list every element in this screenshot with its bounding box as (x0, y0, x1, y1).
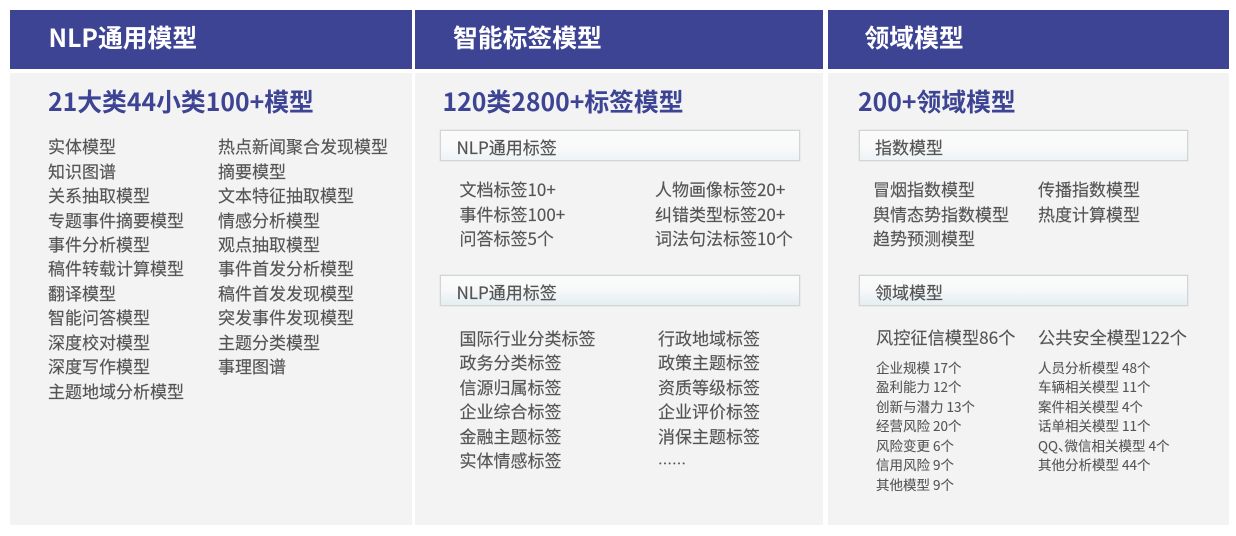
model list column 2: 事件首发分析模型 (218, 255, 354, 280)
risk model breakdown (876, 357, 975, 494)
model list column 2 (218, 133, 388, 378)
model list column 1: 翻译模型 (48, 280, 116, 305)
heading: 风控征信模型86个: 风控征信模型86个 (876, 324, 1015, 349)
risk model breakdown: 盈利能力 12个 (876, 376, 962, 396)
header: 智能标签模型 (415, 10, 823, 69)
model list column 1: 深度写作模型 (48, 353, 150, 378)
public safety model breakdown: 车辆相关模型 11个 (1038, 376, 1151, 396)
tag list column 3 (460, 325, 596, 472)
sub-heading: NLP通用标签 (440, 130, 800, 161)
tag list column 1 (460, 176, 565, 250)
sub-heading: 指数模型 (859, 130, 1188, 161)
model list column 1 (48, 133, 184, 403)
tag list column 3: 政务分类标签 (460, 349, 562, 374)
public safety model breakdown: 话单相关模型 11个 (1038, 415, 1151, 435)
sub-heading: 领域模型 (859, 275, 1188, 306)
sub-heading: NLP通用标签 (second) (440, 275, 800, 306)
tag list column 3: 企业综合标签 (460, 398, 562, 423)
index model list column 1: 舆情态势指数模型 (873, 201, 1009, 226)
model list column 1: 智能问答模型 (48, 304, 150, 329)
model list column 2: 突发事件发现模型 (218, 304, 354, 329)
model list column 2: 热点新闻聚合发现模型 (218, 133, 388, 158)
model list column 1: 实体模型 (48, 133, 116, 158)
model list column 2: 摘要模型 (218, 158, 286, 183)
header: 领域模型 (828, 10, 1229, 69)
model list column 1: 深度校对模型 (48, 329, 150, 354)
header: NLP通用模型 (10, 10, 412, 69)
tag list column 2: 词法句法标签10个 (655, 225, 793, 250)
tag list column 2: 人物画像标签20+ (655, 176, 785, 201)
model list column 2: 主题分类模型 (218, 329, 320, 354)
model list column 2: 文本特征抽取模型 (218, 182, 354, 207)
model list column 1: 事件分析模型 (48, 231, 150, 256)
public safety model breakdown: QQ、微信相关模型 4个 (1038, 435, 1170, 455)
model list column 2: 事理图谱 (218, 353, 286, 378)
header: NLP通用模型: NLP通用模型 (48, 19, 197, 55)
model list column 1: 稿件转载计算模型 (48, 255, 184, 280)
panel: 领域模型 (828, 73, 1229, 525)
panel: 智能标签模型 (415, 73, 823, 525)
risk model breakdown: 创新与潜力 13个 (876, 396, 975, 416)
panel title: 21大类44小类100+模型: 21大类44小类100+模型 (48, 83, 314, 119)
sub-heading: 领域模型: 领域模型 (875, 279, 943, 304)
tag list column 3: 信源归属标签 (460, 374, 562, 399)
index model list column 2 (1038, 176, 1140, 226)
index model list column 1 (873, 176, 1009, 250)
tag list column 1: 事件标签100+ (460, 201, 565, 226)
index model list column 1: 冒烟指数模型 (873, 176, 975, 201)
model list column 2: 稿件首发发现模型 (218, 280, 354, 305)
sub-heading: 指数模型: 指数模型 (875, 134, 943, 159)
public safety model breakdown (1038, 357, 1170, 474)
tag list column 2: 纠错类型标签20+ (655, 201, 785, 226)
header: 智能标签模型: 智能标签模型 (453, 19, 602, 55)
tag list column 1: 文档标签10+ (460, 176, 556, 201)
heading: 公共安全模型122个: 公共安全模型122个 (1038, 324, 1187, 349)
risk model breakdown: 经营风险 20个 (876, 415, 962, 435)
model list column 1: 专题事件摘要模型 (48, 207, 184, 232)
tag list column 3: 金融主题标签 (460, 423, 562, 448)
index model list column 2: 热度计算模型 (1038, 201, 1140, 226)
header: 领域模型: 领域模型 (864, 19, 964, 55)
panel title: 200+领域模型: 200+领域模型 (858, 83, 1016, 119)
public safety model breakdown: 其他分析模型 44个 (1038, 454, 1151, 474)
risk model breakdown: 风险变更 6个 (876, 435, 954, 455)
risk model breakdown: 信用风险 9个 (876, 454, 954, 474)
tag list column 4: 资质等级标签 (658, 374, 760, 399)
tag list column 4: 企业评价标签 (658, 398, 760, 423)
index model list column 2: 传播指数模型 (1038, 176, 1140, 201)
risk model breakdown: 其他模型 9个 (876, 474, 954, 494)
panel title: 120类2800+标签模型: 120类2800+标签模型 (442, 83, 684, 119)
index model list column 1: 趋势预测模型 (873, 225, 975, 250)
tag list column 1: 问答标签5个 (460, 225, 554, 250)
sub-heading: NLP通用标签 (second): NLP通用标签 (456, 279, 557, 304)
tag list column 4: …… (658, 454, 686, 474)
tag list column 3: 实体情感标签 (460, 447, 562, 472)
tag list column 4: 政策主题标签 (658, 349, 760, 374)
model list column 1: 关系抽取模型 (48, 182, 150, 207)
model list column 1: 知识图谱 (48, 158, 116, 183)
panel: NLP通用模型 (10, 73, 412, 525)
model list column 2: 情感分析模型 (218, 207, 320, 232)
tag list column 3: 国际行业分类标签 (460, 325, 596, 350)
tag list column 4: 消保主题标签 (658, 423, 760, 448)
public safety model breakdown: 人员分析模型 48个 (1038, 357, 1151, 377)
tag list column 2 (655, 176, 793, 250)
public safety model breakdown: 案件相关模型 4个 (1038, 396, 1143, 416)
tag list column 4 (658, 325, 760, 474)
risk model breakdown: 企业规模 17个 (876, 357, 962, 377)
model list column 2: 观点抽取模型 (218, 231, 320, 256)
model list column 1: 主题地域分析模型 (48, 378, 184, 403)
tag list column 4: 行政地域标签 (658, 325, 760, 350)
sub-heading: NLP通用标签: NLP通用标签 (456, 134, 557, 159)
